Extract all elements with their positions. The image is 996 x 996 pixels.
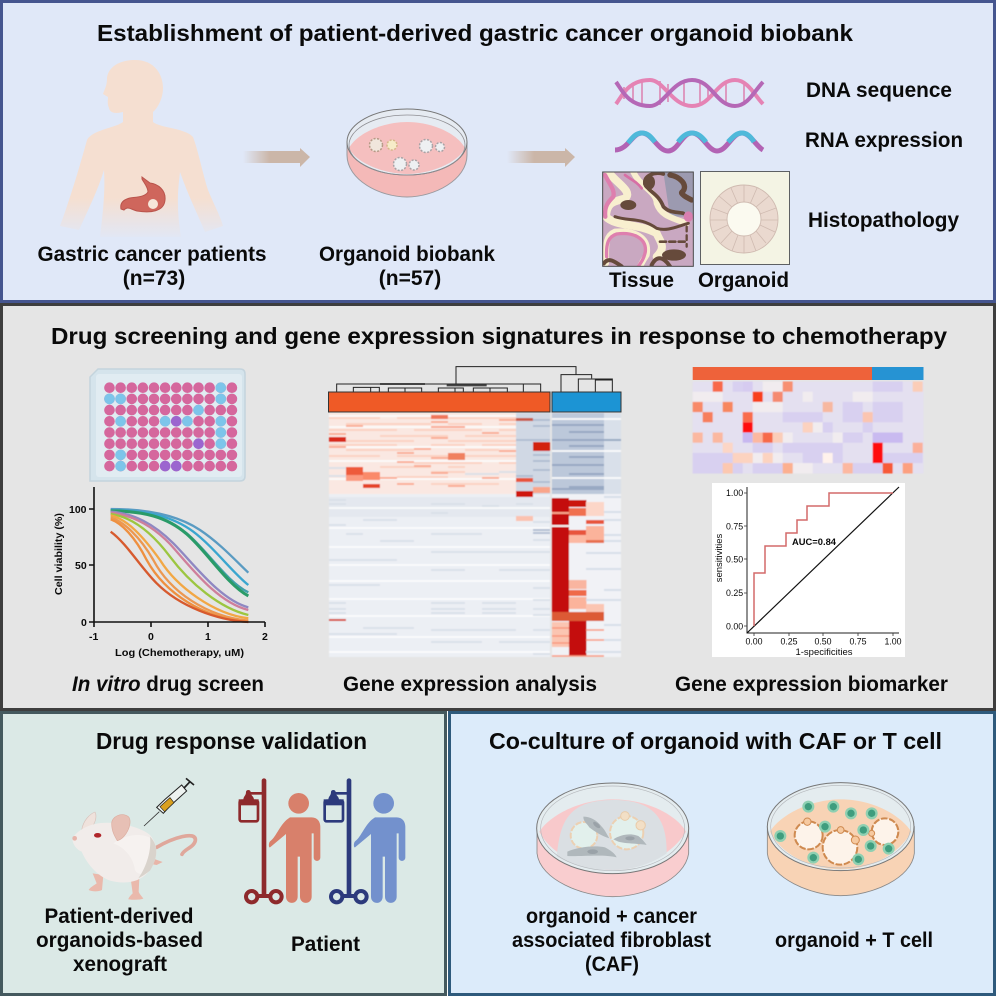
x tick 1.00: 1.00 xyxy=(884,636,902,646)
icon: IV stand and patient, red xyxy=(239,781,320,903)
arrow: biobank to profiling xyxy=(507,148,575,167)
title: drug screening: Drug screening and gene expression signatures in response to chemotherapy xyxy=(51,323,947,349)
title: co-culture: Co-culture of organoid with CAF or T cell xyxy=(489,728,942,754)
icon: T cell co-culture dish xyxy=(767,783,914,896)
label: patient-derived xenograft: Patient-derived xyxy=(44,905,194,928)
y axis title: Cell viability (%) xyxy=(53,513,65,595)
label: organoid biobank: Organoid biobank xyxy=(319,243,495,266)
title: establishment: Establishment of patient-derived gastric cancer organoid biobank xyxy=(97,20,853,46)
icon: RNA strand xyxy=(615,133,763,151)
AUC label: AUC=0.84 xyxy=(792,537,836,547)
right block reds xyxy=(552,498,569,612)
icon: syringe xyxy=(144,778,194,826)
tick label: 0: 0 xyxy=(81,617,87,629)
x axis title: 1-specificities: 1-specificities xyxy=(795,647,853,658)
icon: IV stand and patient, blue xyxy=(324,781,405,903)
x axis title: Log (Chemotherapy, uM) xyxy=(115,647,244,659)
x tick 0.00: 0.00 xyxy=(745,636,763,646)
tick label: 50: 50 xyxy=(75,560,87,572)
label: RNA expression: RNA expression xyxy=(805,129,963,152)
caption: in vitro drug screen: In vitro drug screen xyxy=(72,673,264,696)
panel: drug screening and gene expression xyxy=(2,304,994,994)
icon: mouse with syringe xyxy=(72,778,195,900)
tick label: 2: 2 xyxy=(262,631,268,643)
label: organoid: Organoid xyxy=(698,269,789,292)
y tick 0.50: 0.50 xyxy=(726,554,743,564)
icon: CAF co-culture dish xyxy=(537,783,689,897)
title: drug response validation: Drug response validation xyxy=(96,728,367,754)
dendrogram xyxy=(337,367,612,392)
y axis title: sensitivities: sensitivities xyxy=(714,533,725,582)
biomarker cells xyxy=(693,382,924,474)
icon: 96-well plate xyxy=(90,369,245,481)
label: organoid + cancer: organoid + cancer xyxy=(526,905,697,928)
chart: ROC curve xyxy=(712,483,905,658)
label: histopathology: Histopathology xyxy=(808,209,959,232)
label: DNA sequence: DNA sequence xyxy=(806,79,952,102)
label: n=57: (n=57) xyxy=(379,267,441,290)
icon: human body with stomach xyxy=(60,60,223,237)
group bar: sensitive xyxy=(328,392,550,412)
chart: gene expression heatmap with dendrogram xyxy=(328,367,621,657)
label: tissue: Tissue xyxy=(609,269,674,292)
icon: organoid dish xyxy=(347,109,467,197)
label: organoid + T cell: organoid + T cell xyxy=(775,929,933,952)
y tick 0.75: 0.75 xyxy=(726,522,743,532)
group bar: biomarker sensitive xyxy=(693,367,872,380)
panel: organoid biobank establishment xyxy=(2,2,994,302)
label: patient: Patient xyxy=(291,933,360,956)
y tick 0.25: 0.25 xyxy=(726,588,743,598)
group bar: resistant xyxy=(552,392,621,412)
panel: drug response validation xyxy=(2,712,446,994)
label: n=73: (n=73) xyxy=(123,267,185,290)
heatmap cells xyxy=(329,413,621,657)
label: organoids-based: organoids-based xyxy=(36,929,203,952)
panel: co-culture xyxy=(450,712,994,994)
caption: gene expression biomarker: Gene expression biomarker xyxy=(675,673,948,696)
image: organoid histology xyxy=(700,172,790,264)
tick label: 1: 1 xyxy=(205,631,211,643)
label: CAF: (CAF) xyxy=(585,953,639,976)
icon: DNA helix xyxy=(616,80,763,106)
image: tissue histology xyxy=(603,172,693,266)
label: xenograft: xenograft xyxy=(73,953,167,976)
label: associated fibroblast: associated fibroblast xyxy=(512,929,711,952)
tick label: -1: -1 xyxy=(89,631,98,643)
x tick 0.25: 0.25 xyxy=(780,636,798,646)
tick label: 0 x: 0 xyxy=(148,631,154,643)
caption: gene expression analysis: Gene expression analysis xyxy=(343,673,597,696)
y tick 0.00: 0.00 xyxy=(726,622,743,632)
group bar: biomarker resistant xyxy=(872,367,924,380)
label: gastric cancer patients: Gastric cancer patients xyxy=(38,243,266,266)
x tick 0.75: 0.75 xyxy=(849,636,867,646)
tick label: 100: 100 xyxy=(69,504,87,516)
chart: biomarker heatmap xyxy=(72,367,948,696)
arrow: patients to biobank xyxy=(243,148,310,167)
chart: cell viability dose-response curves xyxy=(53,487,268,659)
x tick 0.50: 0.50 xyxy=(814,636,832,646)
y tick 1.00: 1.00 xyxy=(726,488,743,498)
